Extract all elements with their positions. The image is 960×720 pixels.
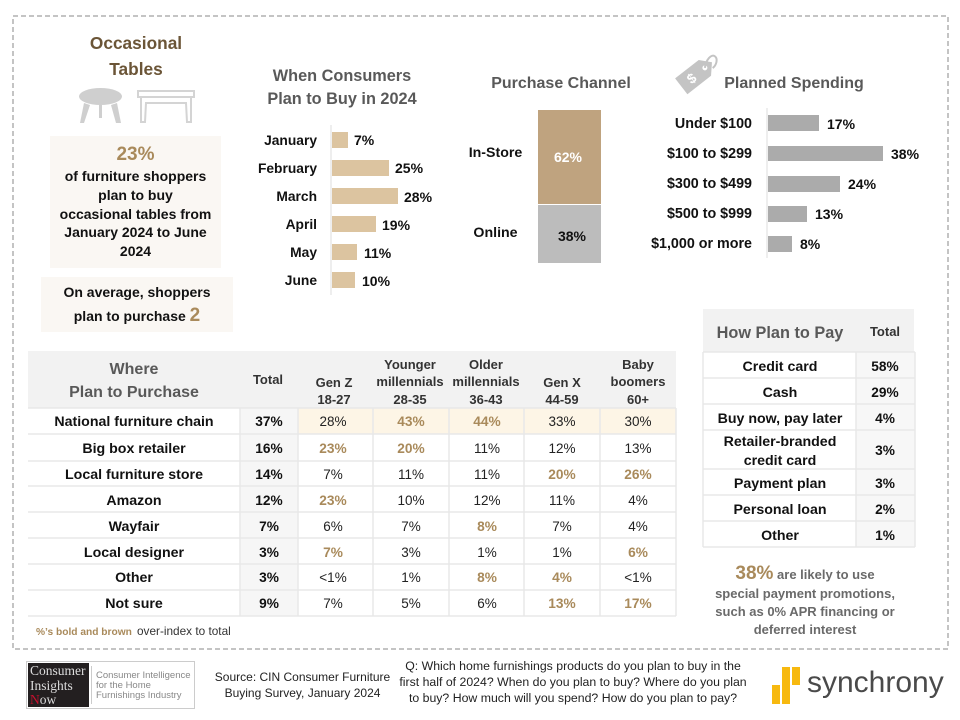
table header: Gen Z	[316, 375, 352, 390]
icon: price tag: $	[683, 69, 700, 87]
table: How Plan to Pay	[703, 309, 915, 547]
table: How Plan to Pay: 3%	[875, 476, 895, 491]
table header: Total	[253, 372, 283, 387]
callout: average purchase: plan to purchase 2	[74, 305, 200, 326]
table: How Plan to Pay: How Plan to Pay	[717, 324, 843, 342]
bar chart: planned spending: 17%	[827, 116, 856, 132]
callout: 23% of shoppers: plan to buy	[98, 187, 173, 203]
table: Where Plan to Purchase	[28, 351, 676, 616]
row: Local furniture store: 26%	[624, 467, 652, 482]
row: Amazon: 12%	[255, 493, 283, 508]
row: Local furniture store: 11%	[398, 467, 424, 482]
callout: 23% of shoppers: 23%	[116, 144, 155, 165]
icon: rectangular table	[138, 91, 194, 122]
note: over-index	[36, 624, 231, 638]
row: Amazon: Amazon	[106, 493, 162, 509]
row: Wayfair: 6%	[323, 519, 343, 534]
bar chart: planned spending: 8%	[800, 236, 821, 252]
logo: Consumer Insights Now: Consumer	[30, 663, 86, 678]
table header: boomers	[611, 374, 665, 389]
row: Amazon: 4%	[628, 493, 648, 508]
bar chart: planned spending	[651, 108, 920, 258]
bar chart: months: January	[264, 133, 317, 148]
icon: price tag	[675, 51, 723, 94]
callout: 23% of shoppers: of furniture shoppers	[65, 168, 206, 184]
row: Big box retailer: 16%	[255, 441, 283, 456]
note: over-index: %’s bold and brown	[36, 627, 132, 638]
note: over-index: over-index to total	[137, 624, 231, 638]
logo: Consumer Insights Now: Insights	[30, 678, 73, 693]
bar chart: planned spending: 38%	[891, 146, 920, 162]
heading: Planned Spending: Planned Spending	[724, 75, 864, 92]
row: National furniture chain: 43%	[397, 414, 425, 429]
callout: 23% of shoppers: 2024	[120, 243, 151, 259]
callout: 23% of shoppers	[50, 136, 221, 268]
table: How Plan to Pay: Payment plan	[734, 476, 826, 492]
row: Local designer	[84, 545, 648, 561]
row: Local designer: 6%	[628, 545, 648, 560]
logo: Consumer Insights Now: Consumer Intelligence	[96, 670, 191, 681]
bar chart: planned spending: $1,000 or more	[651, 236, 752, 252]
row: Local furniture store	[65, 467, 652, 483]
stacked bar: purchase channel: Online	[473, 225, 518, 241]
title: Occasional Tables: Tables	[109, 59, 163, 79]
row: Other: 1%	[401, 570, 421, 585]
row: Local designer: 1%	[477, 545, 497, 560]
table header: 44-59	[545, 392, 579, 407]
table: How Plan to Pay: Credit card	[743, 359, 817, 375]
stacked bar: purchase channel: 62%	[554, 149, 583, 165]
row: Amazon: 11%	[549, 493, 575, 508]
row: Big box retailer: 12%	[548, 441, 576, 456]
row: Big box retailer: 23%	[319, 441, 347, 456]
survey question: first half of 2024? When do you plan to buy? Where do you plan	[399, 675, 747, 689]
stacked bar: purchase channel: In-Store	[469, 145, 522, 161]
table header: 18-27	[317, 392, 351, 407]
survey question	[399, 659, 747, 705]
row: National furniture chain: 44%	[473, 414, 501, 429]
table header: 28-35	[393, 392, 427, 407]
stacked bar: purchase channel	[469, 110, 601, 263]
table: How Plan to Pay: 58%	[871, 359, 899, 374]
row: Local furniture store: 20%	[548, 467, 576, 482]
source: Buying Survey, January 2024	[225, 686, 381, 700]
row: Local designer: 3%	[401, 545, 421, 560]
row: Amazon: 23%	[319, 493, 347, 508]
bar chart: months: 10%	[362, 273, 391, 289]
table header: millennials	[376, 374, 444, 389]
callout: average purchase: On average, shoppers	[63, 284, 211, 300]
row: Wayfair: 7%	[259, 519, 279, 534]
source	[215, 670, 391, 700]
table header: Gen X	[543, 375, 581, 390]
bar chart: months: April	[286, 217, 317, 232]
row: Wayfair: Wayfair	[109, 519, 160, 535]
bar chart: months: 28%	[404, 189, 433, 205]
table header: Baby	[622, 357, 655, 372]
row: Local furniture store: Local furniture store	[65, 467, 203, 483]
bar chart: planned spending: 13%	[815, 206, 844, 222]
table: How Plan to Pay: credit card	[744, 453, 816, 469]
bar chart: months: March	[276, 189, 317, 204]
table: How Plan to Pay: Other	[761, 528, 799, 544]
table header: millennials	[452, 374, 520, 389]
callout: average purchase	[41, 277, 233, 332]
title: Occasional Tables	[90, 33, 182, 79]
table header	[69, 357, 665, 407]
table header: 60+	[627, 392, 649, 407]
bar chart: months: 11%	[364, 245, 392, 261]
row: Wayfair: 8%	[477, 519, 497, 534]
row: Big box retailer: 11%	[474, 441, 500, 456]
heading: When Consumers Plan to Buy: Plan to Buy in 2024	[267, 90, 417, 108]
row: Local furniture store: 11%	[474, 467, 500, 482]
heading: When Consumers Plan to Buy	[267, 67, 417, 108]
callout: special payment promotions: such as 0% APR financing or	[715, 604, 895, 619]
row: National furniture chain: 28%	[319, 414, 347, 429]
callout: special payment promotions: special payment promotions,	[715, 586, 895, 601]
table: How Plan to Pay: 1%	[875, 528, 895, 543]
row: Amazon: 10%	[397, 493, 425, 508]
row: Wayfair: 7%	[401, 519, 421, 534]
logo: Consumer Insights Now	[26, 662, 194, 708]
logo: Consumer Insights Now: Now	[30, 692, 56, 707]
row: Not sure: 13%	[548, 596, 576, 611]
row: Big box retailer: 13%	[624, 441, 652, 456]
row: Other: Other	[115, 570, 153, 586]
row: Big box retailer	[82, 441, 652, 457]
row: Not sure	[105, 596, 652, 612]
callout: 23% of shoppers: January 2024 to June	[64, 224, 207, 240]
bar chart: months	[258, 125, 433, 295]
bar chart: months: 19%	[382, 217, 411, 233]
logo: Consumer Insights Now: for the Home	[96, 680, 151, 691]
row: Other: 4%	[552, 570, 572, 585]
row: National furniture chain: 37%	[255, 414, 283, 429]
source: Source: CIN Consumer Furniture	[215, 670, 391, 684]
table header: Plan to Purchase	[69, 384, 199, 401]
row: Other: <1%	[624, 570, 652, 585]
title: Occasional Tables: Occasional	[90, 33, 182, 53]
row: Not sure: 9%	[259, 596, 279, 611]
table: How Plan to Pay: 29%	[871, 385, 899, 400]
survey question: to buy? How much will you spend? How do you plan to pay?	[409, 691, 737, 705]
row: Other: 3%	[259, 570, 279, 585]
row: Other	[115, 570, 652, 586]
row: Not sure: 17%	[624, 596, 652, 611]
row: Other: 8%	[477, 570, 497, 585]
row: Local designer: 7%	[323, 545, 343, 560]
row: National furniture chain: 33%	[548, 414, 576, 429]
bar chart: months: May	[290, 245, 317, 260]
row: National furniture chain: National furniture chain	[54, 414, 214, 430]
stacked bar: purchase channel: 38%	[558, 228, 587, 244]
heading: Purchase Channel: Purchase Channel	[491, 75, 631, 92]
logo: synchrony: synchrony	[807, 666, 944, 699]
survey question: Q: Which home furnishings products do you plan to buy in the	[405, 659, 741, 673]
row: Other: <1%	[319, 570, 347, 585]
table: How Plan to Pay: Buy now, pay later	[718, 411, 843, 427]
icon: round table	[79, 88, 122, 123]
table header: Younger	[384, 357, 436, 372]
table header: 36-43	[469, 392, 503, 407]
table: How Plan to Pay: Retailer-branded	[724, 434, 836, 450]
heading: When Consumers Plan to Buy: When Consumers	[273, 67, 411, 85]
table header: Where	[110, 361, 159, 378]
row: National furniture chain	[54, 414, 652, 430]
logo: Consumer Insights Now: Furnishings Industry	[96, 690, 182, 701]
bar chart: months: 7%	[354, 132, 375, 148]
row: Local designer: Local designer	[84, 545, 185, 561]
logo: synchrony	[772, 666, 944, 704]
bar chart: planned spending: Under $100	[675, 116, 752, 132]
bar chart: planned spending: 24%	[848, 176, 877, 192]
row: Not sure: Not sure	[105, 596, 163, 612]
row: Local designer: 3%	[259, 545, 279, 560]
bar chart: planned spending: $300 to $499	[667, 176, 752, 192]
callout: special payment promotions: deferred interest	[754, 622, 857, 637]
row: Amazon: 12%	[473, 493, 501, 508]
callout: special payment promotions	[715, 563, 895, 637]
row: Wayfair	[109, 519, 648, 535]
bar chart: months: February	[258, 161, 317, 176]
bar chart: planned spending: $100 to $299	[667, 146, 752, 162]
row: Wayfair: 4%	[628, 519, 648, 534]
table: How Plan to Pay: 2%	[875, 502, 895, 517]
table: How Plan to Pay: 4%	[875, 411, 895, 426]
row: Big box retailer: 20%	[397, 441, 425, 456]
row: Big box retailer: Big box retailer	[82, 441, 186, 457]
bar chart: months: June	[285, 273, 317, 288]
row: Local designer: 1%	[552, 545, 572, 560]
row: Not sure: 5%	[401, 596, 421, 611]
row: Local furniture store: 14%	[255, 467, 283, 482]
callout: 23% of shoppers: occasional tables from	[60, 206, 211, 222]
table header: Older	[469, 357, 503, 372]
table: How Plan to Pay: Total	[870, 324, 900, 339]
row: Local furniture store: 7%	[323, 467, 343, 482]
row: National furniture chain: 30%	[624, 414, 652, 429]
callout: special payment promotions: 38% are likely to use	[735, 563, 875, 584]
bar chart: planned spending: $500 to $999	[667, 206, 752, 222]
table: How Plan to Pay: Cash	[763, 385, 797, 401]
table: How Plan to Pay: 3%	[875, 443, 895, 458]
bar chart: months: 25%	[395, 160, 424, 176]
row: Not sure: 7%	[323, 596, 343, 611]
table: How Plan to Pay: Personal loan	[733, 502, 827, 518]
row: Wayfair: 7%	[552, 519, 572, 534]
row: Not sure: 6%	[477, 596, 497, 611]
row: Amazon	[106, 493, 648, 509]
